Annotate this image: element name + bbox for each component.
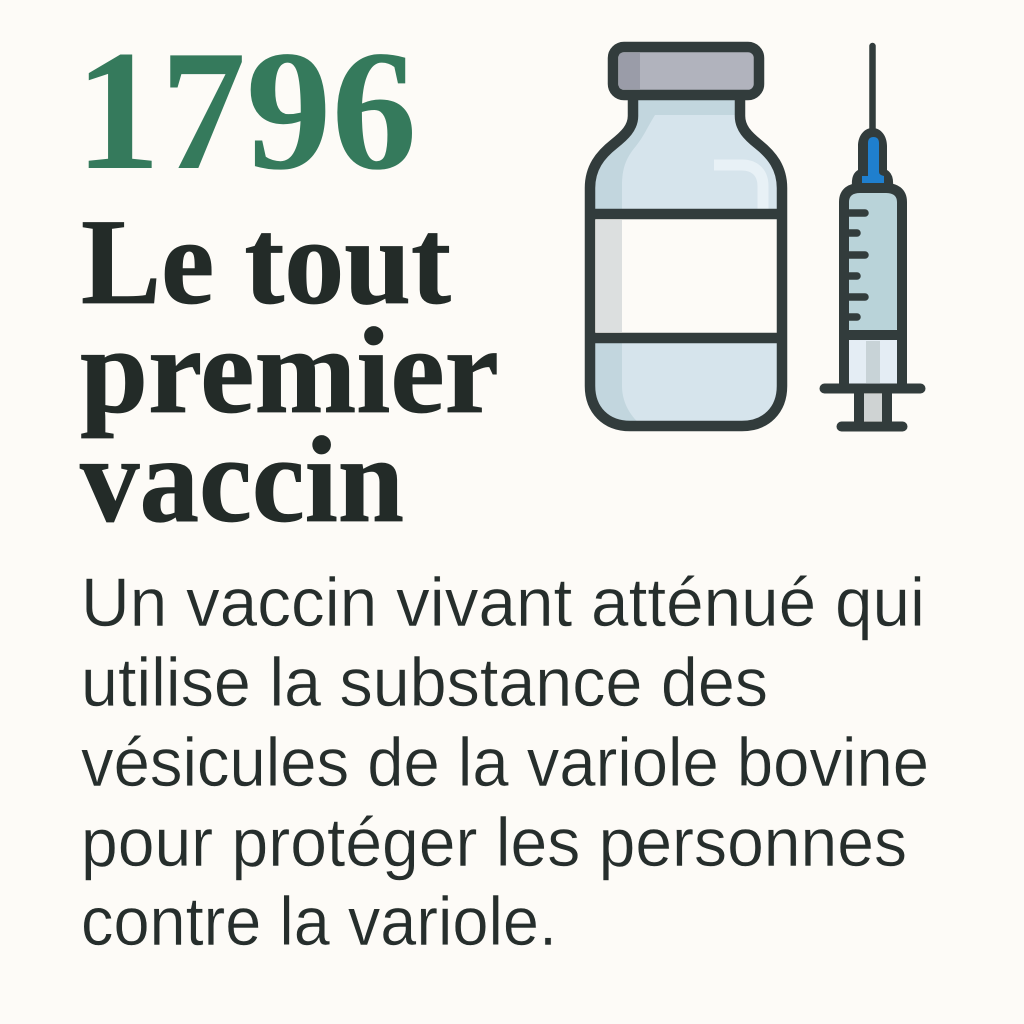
year: 1796: 1796 — [75, 16, 417, 206]
vial neck shade — [638, 98, 735, 115]
blue liquid in hub — [862, 137, 884, 183]
vial glass body — [590, 98, 782, 426]
syringe flange — [824, 384, 920, 394]
plunger inside — [866, 341, 880, 383]
plunger rod — [863, 394, 882, 421]
barrel liquid — [848, 192, 898, 332]
heading: Le tout premier vaccin: Le tout — [81, 193, 451, 330]
vial outline — [590, 96, 782, 426]
plunger rod outline — [859, 392, 887, 426]
body text: Un vaccin vivant atténué qui — [81, 564, 925, 641]
needle — [869, 46, 876, 132]
hub outline — [852, 128, 893, 186]
vial cap shade — [619, 53, 640, 89]
body text: vésicules de la variole bovine — [81, 724, 929, 801]
heading: Le tout premier vaccin — [80, 193, 499, 548]
icon: syringe — [824, 46, 920, 426]
vial label shade — [596, 220, 622, 332]
barrel divider — [844, 330, 902, 340]
barrel lower — [848, 339, 898, 384]
tick marks — [846, 213, 865, 317]
vial highlight — [714, 165, 763, 209]
barrel outline — [844, 188, 902, 388]
vial left shade — [590, 98, 735, 426]
body text: contre la variole. — [81, 883, 557, 960]
icon: vaccine vial — [590, 47, 782, 426]
body text: pour protéger les personnes — [81, 804, 907, 881]
heading: Le tout premier vaccin: vaccin — [80, 411, 404, 548]
heading: Le tout premier vaccin: premier — [80, 302, 499, 439]
vial label — [595, 214, 777, 338]
vial label lines — [590, 214, 782, 338]
body text — [81, 564, 929, 960]
body text: utilise la substance des — [81, 644, 768, 721]
plunger base — [842, 422, 902, 432]
vial cap — [613, 47, 759, 95]
